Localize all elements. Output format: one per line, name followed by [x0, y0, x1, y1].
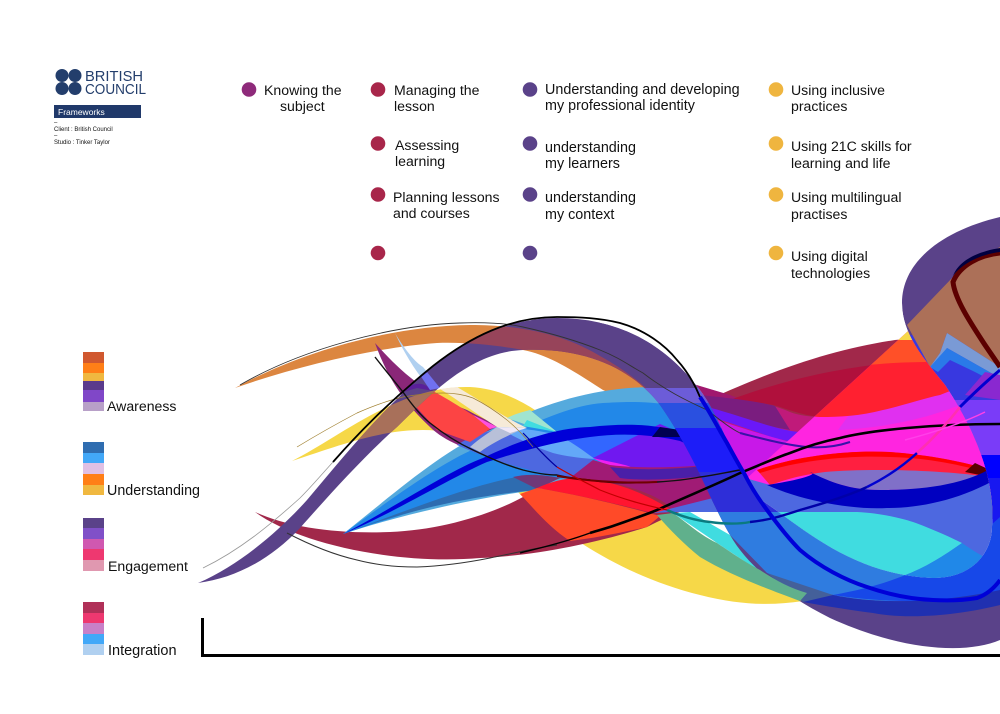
axis — [202, 618, 1000, 656]
right interior — [910, 335, 1000, 400]
key: column 4 using skills: Using 21C skills for — [791, 138, 912, 154]
line: main blue sweep — [700, 397, 1000, 600]
key: column 2 lesson practices: Planning lessons — [393, 189, 500, 205]
purple main ribbon — [198, 217, 1000, 648]
key: column 3 understanding: my context — [545, 207, 614, 223]
key: column 1 Knowing the subject: Knowing the — [264, 82, 342, 98]
navy lower band — [767, 573, 1000, 616]
key: column 2 lesson practices: lesson — [394, 98, 435, 114]
ribbon: light blue — [395, 333, 440, 388]
key: column 2 lesson practices — [371, 82, 500, 260]
line: blue lower wave — [523, 433, 557, 467]
legend: Understanding — [83, 442, 200, 499]
legend: Integration: Integration — [108, 643, 177, 659]
brown wedge in blob — [907, 247, 1000, 367]
ribbon: yellow — [292, 387, 803, 604]
out-of-purple area, bounded by the blob edge — [600, 304, 992, 578]
key: column 3 understanding: my professional identity — [545, 98, 696, 114]
stroke: dark band — [343, 425, 745, 534]
legend: Awareness: Awareness — [107, 398, 176, 414]
line: magenta lower — [375, 357, 740, 483]
ribbon: wine — [255, 338, 990, 559]
right of diagonal warm tints — [740, 327, 1000, 500]
inside purple ribbon overlaps — [358, 247, 1000, 616]
lower blue field — [750, 477, 992, 578]
chevron — [930, 333, 1000, 378]
band: violet wedge — [593, 424, 700, 470]
line: under wine — [287, 533, 557, 567]
credits: Studio : Tinker Taylor — [54, 140, 110, 146]
chart: flowing ribbons — [198, 217, 1000, 648]
legend: Engagement — [83, 518, 188, 574]
key: column 3 understanding: understanding — [545, 140, 636, 156]
key: column 3 understanding: understanding — [545, 190, 636, 206]
logo: British Council: BRITISH — [85, 69, 143, 85]
ribbon: orange — [235, 325, 668, 420]
cyan lens — [778, 512, 962, 575]
dark blue band — [767, 471, 989, 508]
key: column 4 using skills: learning and life — [791, 155, 891, 171]
line: orange outline — [240, 323, 740, 433]
plum band — [704, 395, 968, 442]
overlap: cyan sliver by the green edge — [673, 512, 765, 575]
band: plum lower — [570, 460, 745, 510]
ribbon: fan steel strip — [343, 475, 537, 534]
plum band dark start — [700, 395, 790, 430]
band: dark strip — [610, 460, 745, 480]
key: column 2 lesson practices: and courses — [393, 205, 470, 221]
overlap: yellow magenta red — [407, 391, 493, 442]
credits: Client : British Council — [54, 127, 113, 133]
overlap: pale ribbon — [440, 387, 527, 428]
legend: Understanding: Understanding — [107, 483, 200, 499]
line: main purple edge faint tail — [203, 462, 333, 568]
overlap: red lens — [537, 478, 673, 513]
overlap: orange brown — [468, 326, 648, 392]
lilac lens — [814, 470, 978, 490]
overlap: light ribbon lens — [457, 429, 593, 478]
ribbon: fan inner — [343, 402, 700, 534]
overlap: steel blue under wine — [653, 486, 800, 513]
right lower: sky lens — [900, 575, 904, 576]
overlap: orange red lens — [520, 488, 660, 541]
logo: British Council: COUNCIL — [85, 82, 146, 98]
key: column 1 Knowing the subject: subject — [280, 98, 325, 114]
ribbon: sky fan — [343, 387, 740, 534]
key: column 3 understanding — [523, 82, 740, 260]
key: column 3 understanding: Understanding and developing — [545, 82, 740, 98]
legend: Awareness — [83, 352, 176, 414]
project tag: Frameworks — [54, 105, 141, 118]
overlap: royal blue band — [555, 424, 680, 459]
legend: Engagement: Engagement — [108, 558, 188, 574]
red strip — [757, 452, 990, 485]
key: column 1 Knowing the subject — [242, 82, 342, 114]
key: column 4 using skills: technologies — [791, 265, 870, 281]
dark red curve — [953, 253, 1000, 367]
key: column 2 lesson practices: Managing the — [394, 82, 480, 98]
key: column 2 lesson practices: learning — [395, 153, 445, 169]
key: column 4 using skills: Using inclusive — [791, 82, 885, 98]
logo: British Council — [56, 69, 146, 98]
ribbon: magenta — [375, 343, 560, 470]
key: column 2 lesson practices: Assessing — [395, 137, 459, 153]
credits: – — [54, 120, 58, 126]
key: column 3 understanding: my learners — [545, 156, 620, 172]
overlap: green edge — [657, 513, 807, 601]
wine base — [707, 338, 992, 519]
overlap: yellow brown — [358, 390, 802, 602]
line: yellow outline — [297, 393, 533, 447]
key: column 4 using skills: practises — [791, 206, 847, 222]
line: pink wave — [905, 412, 985, 440]
violet wave strip — [712, 408, 798, 441]
sky wave top — [696, 384, 736, 414]
key: column 4 using skills: practices — [791, 98, 847, 114]
line: main purple edge — [333, 317, 700, 462]
key: column 4 using skills: Using multilingual — [791, 189, 901, 205]
royal lower band — [833, 517, 1000, 601]
sky lens corner — [906, 543, 982, 578]
crimson band — [734, 361, 952, 416]
key: column 4 using skills: Using digital — [791, 248, 868, 264]
key: column 4 using skills — [769, 82, 912, 281]
slices of the purple band — [644, 388, 708, 403]
magenta field — [718, 410, 990, 490]
credits — [54, 120, 113, 146]
credits: – — [54, 133, 58, 139]
legend: Integration — [83, 602, 177, 659]
project tag: Frameworks: Frameworks — [58, 107, 105, 117]
